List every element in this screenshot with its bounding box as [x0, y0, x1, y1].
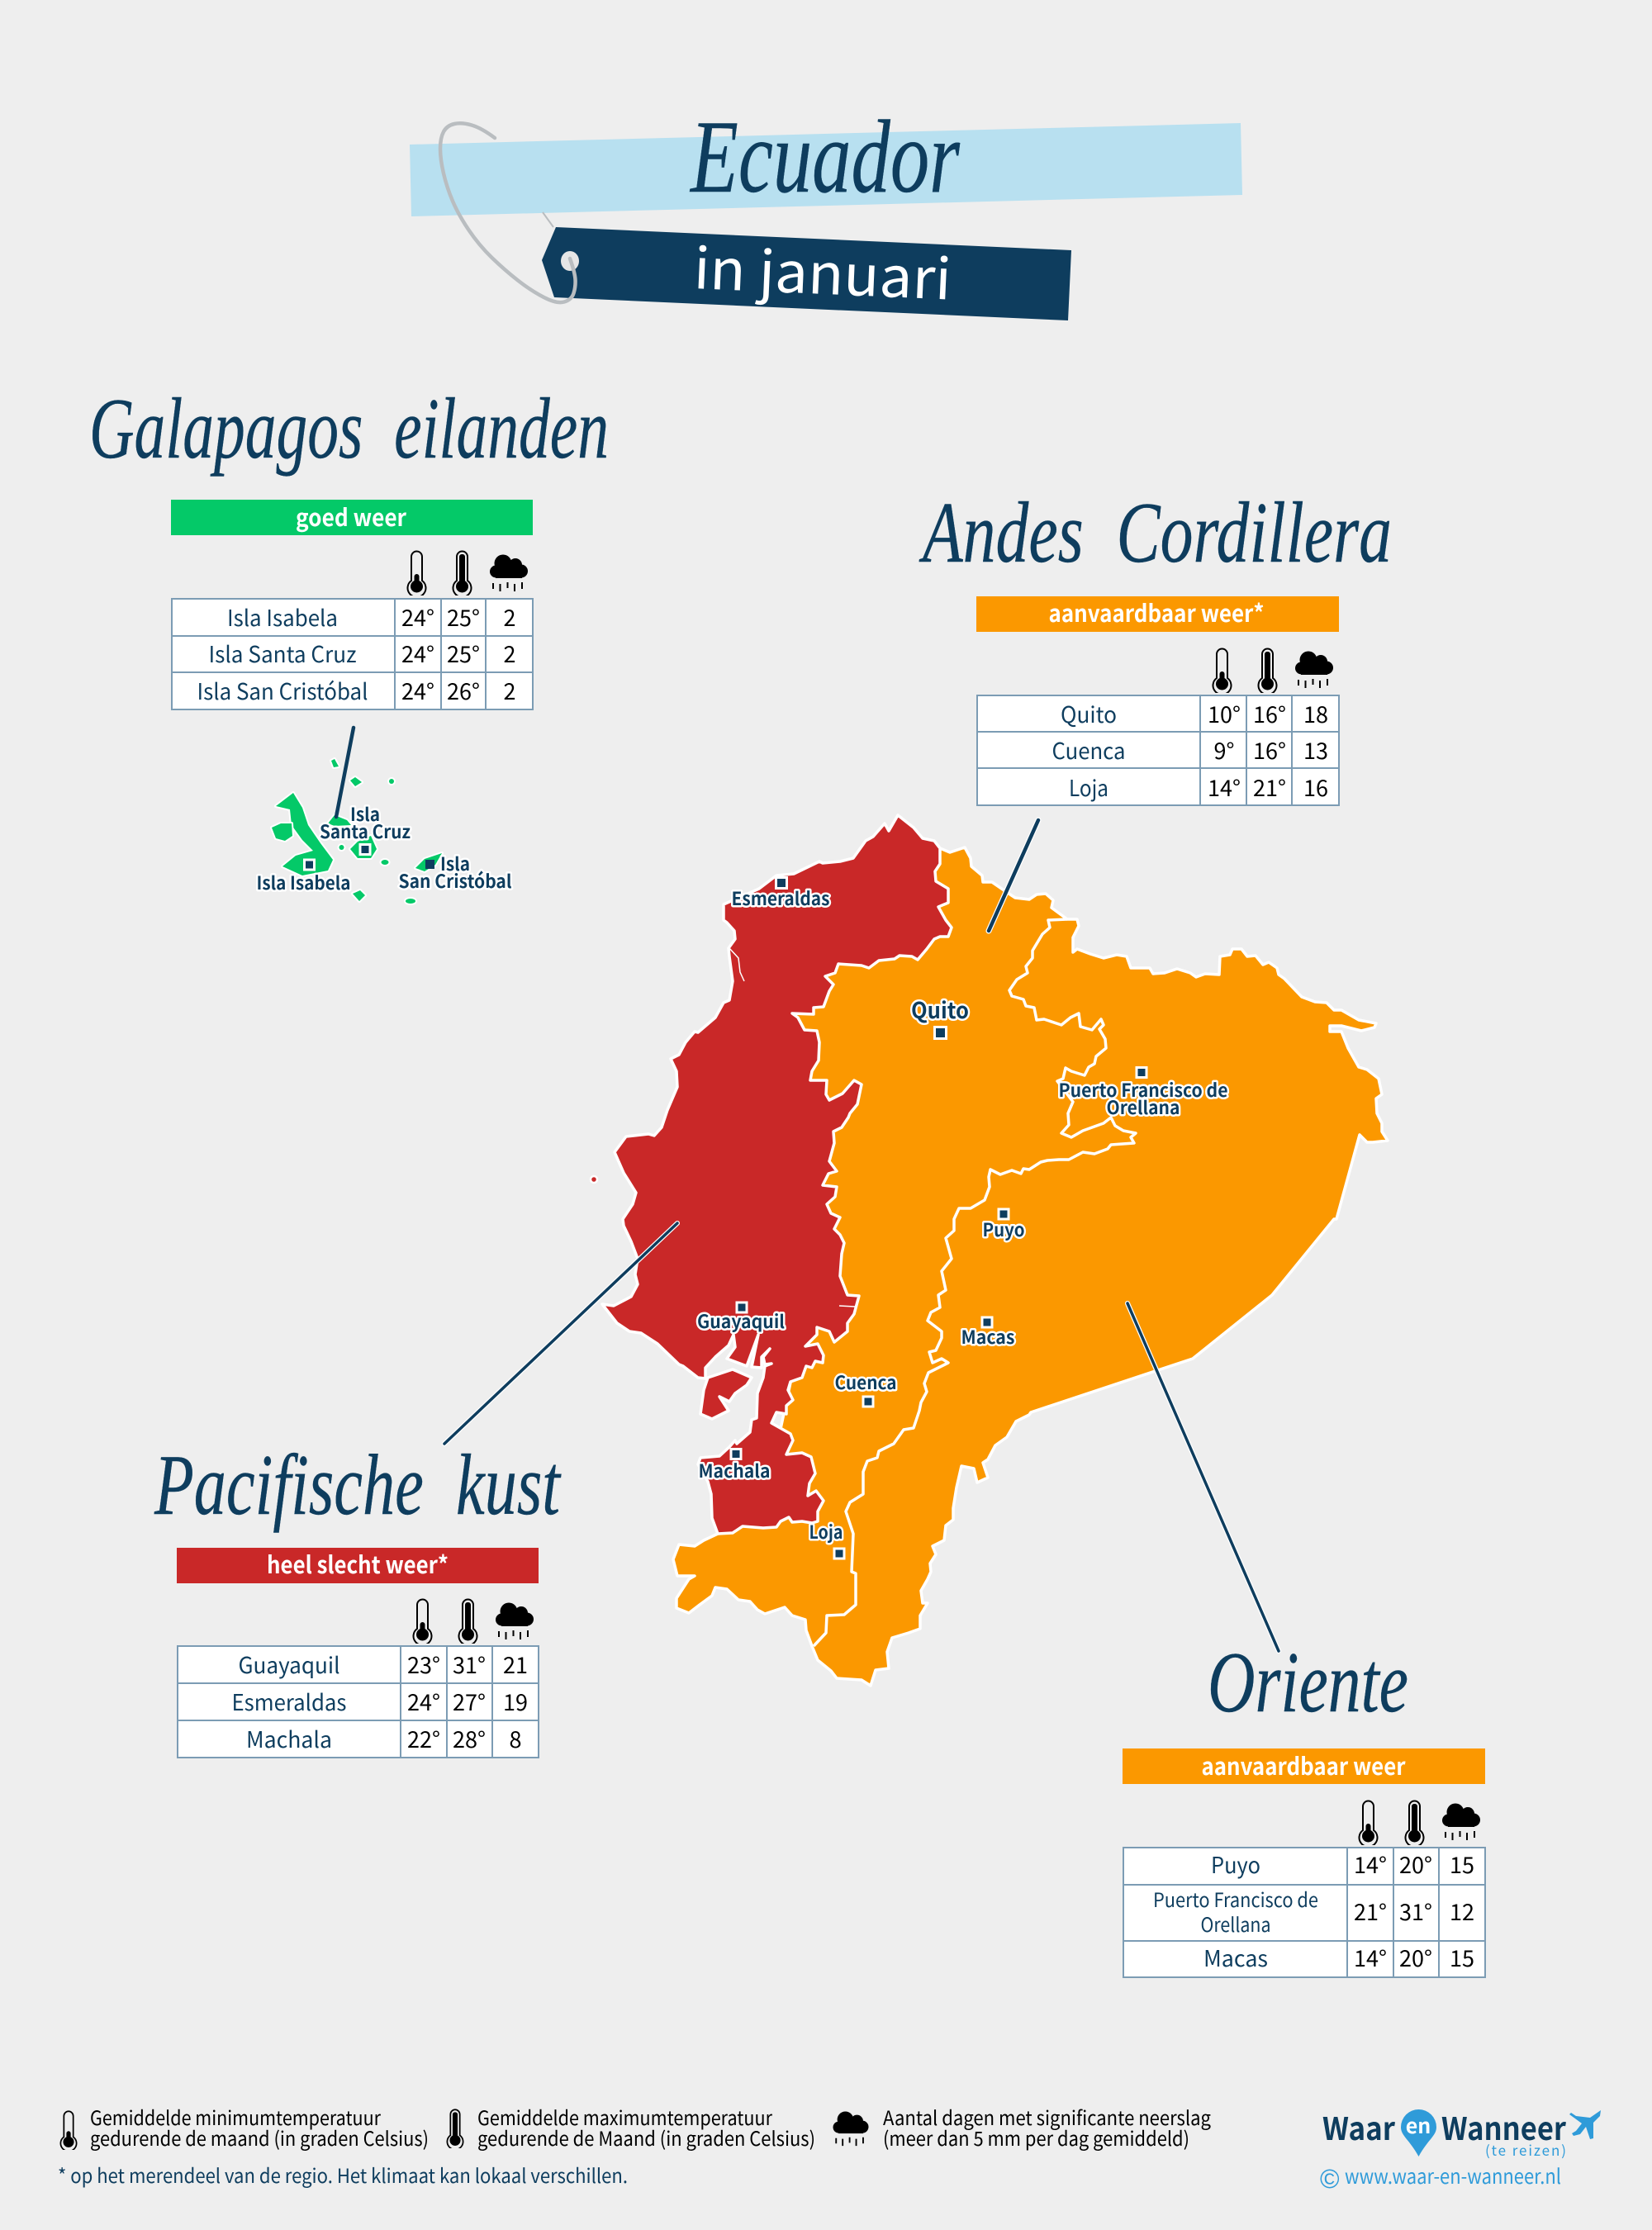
subtitle: in januari	[692, 223, 953, 316]
city: Puerto Francisco de Orellana: Orellana	[1107, 1094, 1180, 1120]
icon: minimum temperature	[408, 552, 426, 597]
icon: minimum temperature	[1360, 1801, 1378, 1847]
table: 2	[504, 637, 515, 669]
heading: Pacifische kust	[154, 1436, 562, 1533]
legend text: minimum temperature: gedurende de maand (in graden Celsius)	[90, 2123, 429, 2152]
table: 28°	[453, 1722, 486, 1754]
icon: maximum temperature	[1406, 1801, 1424, 1847]
icon: legend maximum temperature	[447, 2109, 463, 2150]
city: Macas: Macas	[961, 1323, 1015, 1350]
rating bar	[177, 1546, 539, 1583]
heading: Andes Cordillera	[919, 484, 1392, 581]
leader line: Pacific coast	[444, 1223, 677, 1444]
city: Quito	[911, 993, 969, 1039]
table: 2	[504, 600, 515, 633]
table: 26°	[447, 674, 480, 706]
region: Pacific coast (red)	[602, 815, 952, 1534]
table: Isla Isabela	[227, 600, 338, 633]
small island (red)	[591, 1176, 597, 1183]
city: Cuenca	[834, 1369, 897, 1407]
footnote: * op het merendeel van de regio. Het klimaat kan lokaal verschillen.	[58, 2160, 628, 2189]
table	[1123, 1848, 1485, 1977]
table: 12	[1450, 1895, 1474, 1927]
table: Isla San Cristóbal	[197, 674, 368, 706]
table: 14°	[1208, 771, 1241, 803]
icon: legend minimum temperature	[60, 2111, 77, 2152]
region: Puná island (red)	[700, 1369, 752, 1419]
table	[977, 695, 1339, 805]
city: Cuenca: Cuenca	[834, 1369, 897, 1395]
table: Puyo	[1211, 1848, 1260, 1880]
table: 15	[1450, 1848, 1474, 1880]
city: Quito: Quito	[911, 993, 969, 1025]
island: Fernandina	[272, 823, 292, 841]
panel: Andes Cordillera	[919, 484, 1392, 805]
legend text: maximum temperature: gedurende de Maand (in graden Celsius)	[477, 2123, 815, 2152]
label: Isla Isabela: Isla Isabela	[256, 869, 350, 895]
table: Macas	[1203, 1941, 1268, 1973]
table: 21°	[1354, 1895, 1387, 1927]
city: Machala: Machala	[699, 1457, 770, 1483]
table: Loja	[1069, 771, 1108, 803]
title block	[410, 100, 1242, 320]
table: 21°	[1253, 771, 1286, 803]
rating bar: goed weer	[296, 499, 406, 534]
logo tagline: (te reizen)	[1485, 2139, 1566, 2160]
panel: Oriente	[1123, 1634, 1485, 1977]
table: Puerto Francisco de	[1153, 1884, 1318, 1913]
legend text: minimum temperature: Gemiddelde minimumtemperatuur	[90, 2102, 382, 2131]
rating bar: aanvaardbaar weer*	[1049, 595, 1264, 629]
map of Ecuador	[591, 815, 1388, 1686]
tag string: short segment	[543, 212, 553, 227]
legend text: maximum temperature: Gemiddelde maximumtemperatuur	[477, 2102, 773, 2131]
legend text: rain: (meer dan 5 mm per dag gemiddeld)	[883, 2123, 1189, 2152]
table: 21	[503, 1648, 528, 1680]
leader line: Galapagos	[336, 728, 354, 817]
table	[172, 599, 533, 709]
table: 16	[1303, 771, 1328, 803]
icon: maximum temperature	[453, 552, 471, 597]
table: 24°	[407, 1685, 440, 1717]
subtitle tag: dark blue	[542, 227, 1071, 320]
table: 14°	[1354, 1848, 1387, 1880]
rating bar: aanvaardbaar weer	[1201, 1748, 1406, 1782]
island: Isabela	[276, 793, 333, 875]
title banner: light blue	[410, 123, 1242, 216]
tag hole	[561, 251, 579, 271]
table: Esmeraldas	[231, 1685, 347, 1717]
table: 14°	[1354, 1941, 1387, 1973]
rating bar	[171, 499, 533, 535]
city: Puerto Francisco de Orellana: Puerto Francisco de	[1059, 1076, 1227, 1103]
logo word: Wanneer: Wanneer	[1441, 2104, 1566, 2149]
icon: rain	[1442, 1804, 1480, 1840]
logo pin	[1401, 2109, 1436, 2156]
table: 15	[1450, 1941, 1474, 1973]
table: 20°	[1399, 1941, 1432, 1973]
table: 23°	[407, 1648, 440, 1680]
table: Orellana	[1201, 1909, 1270, 1938]
logo word: en: en	[1406, 2110, 1431, 2140]
icon: rain	[496, 1602, 534, 1639]
label: Isla Santa Cruz: Isla	[350, 800, 380, 827]
city: Puerto Francisco de Orellana	[1059, 1067, 1227, 1120]
table: 2	[504, 674, 515, 706]
table: 10°	[1208, 697, 1241, 729]
legend text: rain	[883, 2102, 1211, 2152]
leader line: Oriente	[1127, 1303, 1279, 1651]
table: 25°	[447, 637, 480, 669]
region: Andes and Oriente (orange)	[673, 847, 1388, 1686]
panel: Pacifische kust	[154, 1436, 562, 1758]
table: 9°	[1214, 733, 1234, 766]
city: Loja: Loja	[809, 1518, 843, 1544]
table: Guayaquil	[238, 1648, 340, 1680]
logo word: Waar: Waar	[1322, 2104, 1395, 2149]
city: Puyo: Puyo	[983, 1216, 1024, 1242]
table: 20°	[1399, 1848, 1432, 1880]
table: Cuenca	[1052, 733, 1125, 766]
island: Santiago	[328, 815, 351, 826]
legend text: minimum temperature	[90, 2102, 429, 2152]
label: Isla San Cristóbal: San Cristóbal	[398, 867, 512, 894]
city: Esmeraldas: Esmeraldas	[732, 885, 830, 911]
table: Machala	[246, 1722, 332, 1754]
boundary: Andes / Oriente	[814, 919, 1136, 1646]
label: Isla San Cristóbal	[398, 850, 512, 894]
icon: rain	[490, 555, 528, 591]
small islets	[331, 759, 415, 904]
table: 13	[1303, 733, 1328, 766]
city: Loja	[809, 1518, 844, 1559]
table: 19	[503, 1685, 528, 1717]
panel: Galapagos eilanden	[89, 380, 609, 709]
logo: Waar en Wanneer	[1320, 2104, 1601, 2194]
table: 24°	[401, 674, 434, 706]
icon: minimum temperature	[413, 1599, 431, 1645]
table: 24°	[401, 600, 434, 633]
icon: minimum temperature	[1213, 649, 1231, 695]
Galapagos labels	[256, 800, 512, 895]
icon: legend rain	[833, 2111, 869, 2146]
thin inlets	[729, 948, 855, 1307]
Galapagos island map	[272, 759, 442, 904]
heading: Oriente	[1208, 1634, 1408, 1730]
table: 27°	[453, 1685, 486, 1717]
table: 16°	[1253, 697, 1286, 729]
icon: maximum temperature	[459, 1599, 477, 1645]
copyright symbol: ©	[1320, 2164, 1340, 2194]
island: Santa Cruz	[350, 836, 377, 858]
icon: rain	[1295, 651, 1333, 688]
website: www.waar-en-wanneer.nl	[1345, 2161, 1561, 2190]
rating bar: heel slecht weer*	[267, 1546, 449, 1581]
legend text: maximum temperature	[477, 2102, 815, 2152]
legend	[58, 2102, 1211, 2189]
rating bar	[976, 595, 1339, 632]
table: Isla Santa Cruz	[208, 637, 357, 669]
leader line: Andes	[989, 820, 1038, 931]
island: San Cristóbal	[415, 853, 442, 871]
icon: maximum temperature	[1259, 649, 1277, 695]
table: 31°	[1399, 1895, 1432, 1927]
table: 18	[1303, 697, 1328, 729]
title: Ecuador	[689, 100, 961, 215]
table: 31°	[453, 1648, 486, 1680]
table	[178, 1646, 539, 1758]
icon: plane	[1569, 2110, 1601, 2139]
table: 25°	[447, 600, 480, 633]
table: 22°	[407, 1722, 440, 1754]
heading: Galapagos eilanden	[89, 380, 609, 477]
table: 8	[509, 1722, 522, 1754]
table: Quito	[1061, 697, 1117, 729]
legend text: rain: Aantal dagen met significante neerslag	[883, 2102, 1211, 2131]
label: Isla Santa Cruz	[320, 800, 411, 854]
city: Guayaquil: Guayaquil	[697, 1307, 785, 1334]
table: 24°	[401, 637, 434, 669]
tag ring	[440, 123, 576, 302]
label: Isla San Cristóbal: Isla	[440, 850, 470, 876]
rating bar	[1123, 1748, 1485, 1784]
table: 16°	[1253, 733, 1286, 766]
label: Isla Santa Cruz: Santa Cruz	[320, 818, 411, 844]
